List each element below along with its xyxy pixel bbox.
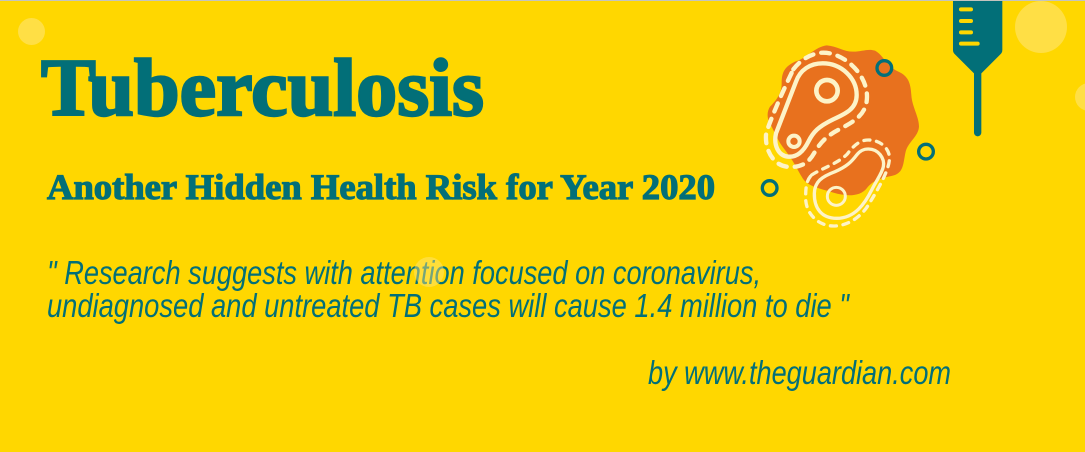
- icon: orange blob: [768, 45, 919, 195]
- source attribution: by www.theguardian.com: [648, 354, 951, 391]
- decorative circle: top left: [18, 18, 45, 45]
- icon: ring lower left: [762, 181, 777, 195]
- subtitle: Another Hidden Health Risk for Year 2020: [47, 167, 715, 207]
- icon: small bacterium: [806, 140, 889, 226]
- title: Tuberculosis: [41, 42, 484, 133]
- illustration: bacteria and syringe: [762, 1, 1002, 226]
- decorative circle: top right: [1015, 1, 1067, 53]
- icon: large bacterium: [766, 53, 867, 167]
- icon: syringe: [953, 1, 1002, 136]
- icon: ring right: [919, 144, 933, 159]
- decorative circle: over quote: [414, 257, 444, 287]
- quote line 1: " Research suggests with attention focused on coronavirus,: [47, 254, 761, 291]
- decorative circle: right edge: [1075, 83, 1085, 111]
- quote text: [47, 254, 850, 324]
- quote line 2: undiagnosed and untreated TB cases will cause 1.4 million to die ": [47, 287, 850, 324]
- icon: ring upper: [877, 61, 892, 75]
